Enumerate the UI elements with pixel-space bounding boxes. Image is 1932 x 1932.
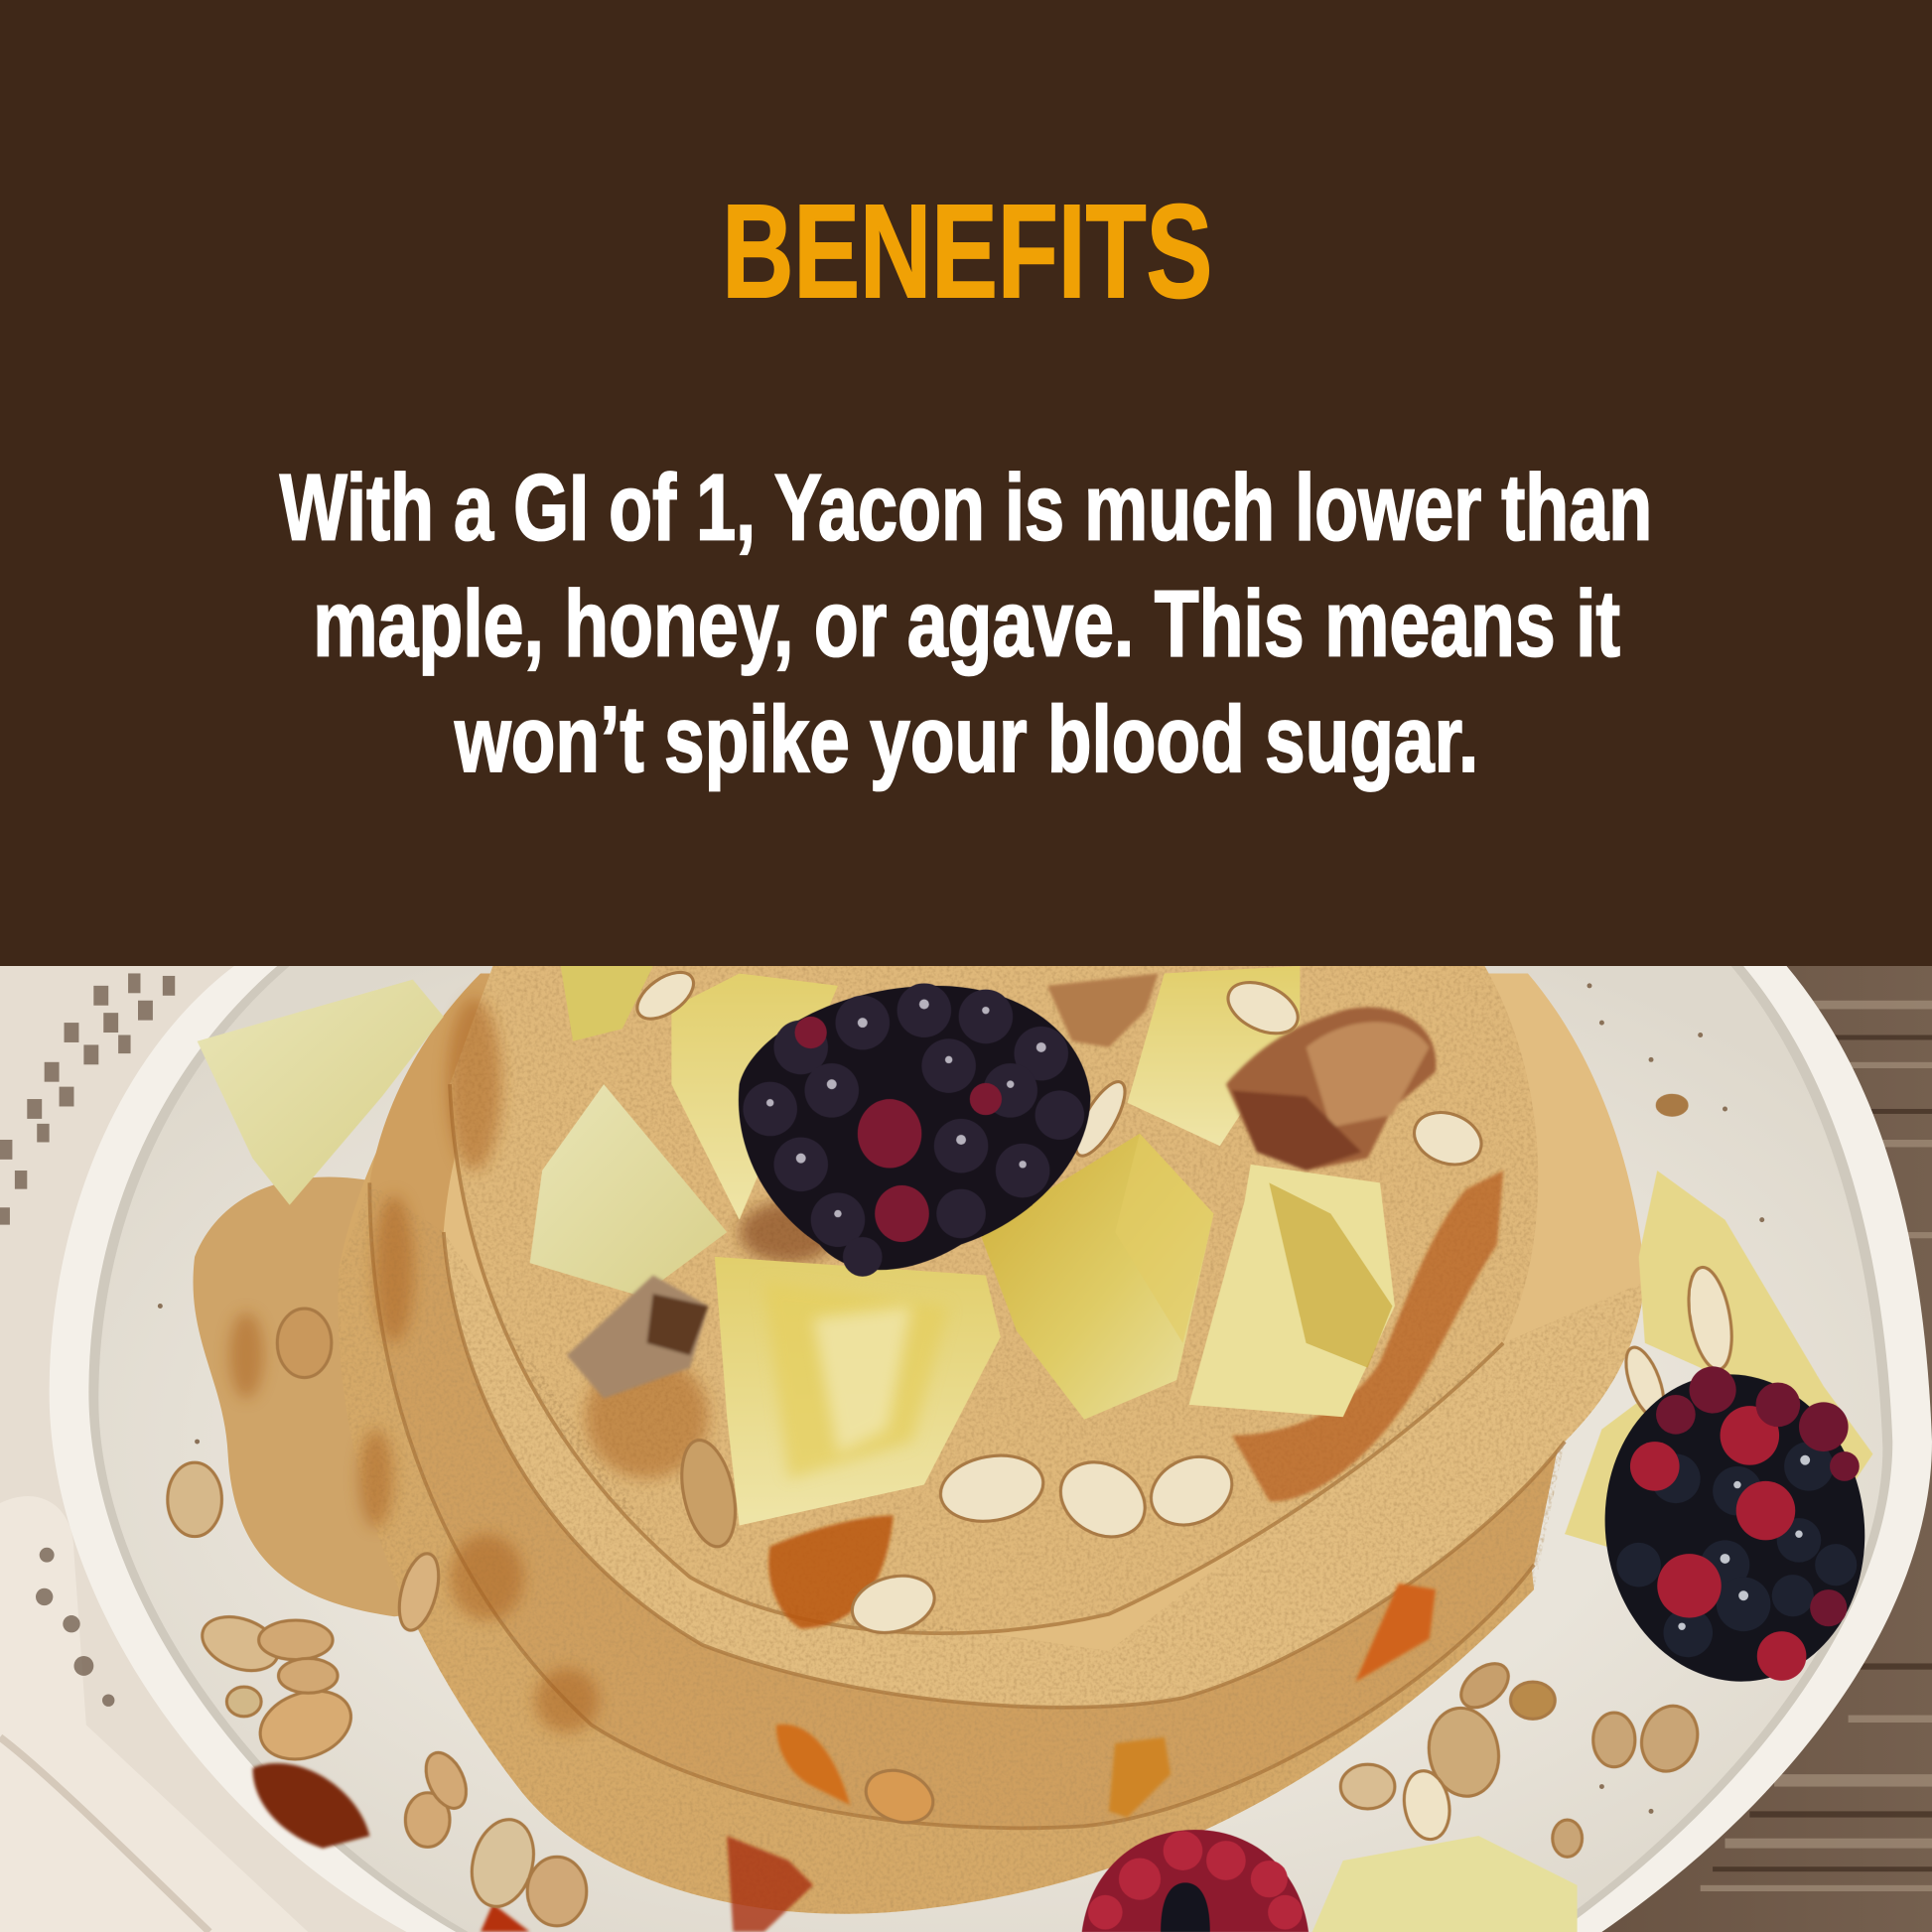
oats: [168, 963, 1738, 1926]
napkin: [0, 966, 407, 1932]
syrup drizzle: [252, 1171, 1503, 1932]
body text: [280, 456, 1652, 791]
plate: [50, 966, 1932, 1932]
title: BENEFITS: [722, 178, 1212, 326]
pancake stack: [194, 966, 1645, 1914]
food photo: pancakes on a plate: [0, 963, 1932, 1932]
header panel background: [0, 0, 1932, 966]
body text: won’t spike your blood sugar.: [454, 687, 1478, 791]
pecans and granola: [567, 973, 1436, 1399]
blackberry: right: [1604, 1366, 1864, 1682]
apple chunks: [198, 966, 1872, 1932]
wood table: [1602, 966, 1932, 1932]
blackberry: bottom: [1082, 1830, 1309, 1932]
blackberry: centre: [739, 983, 1090, 1277]
